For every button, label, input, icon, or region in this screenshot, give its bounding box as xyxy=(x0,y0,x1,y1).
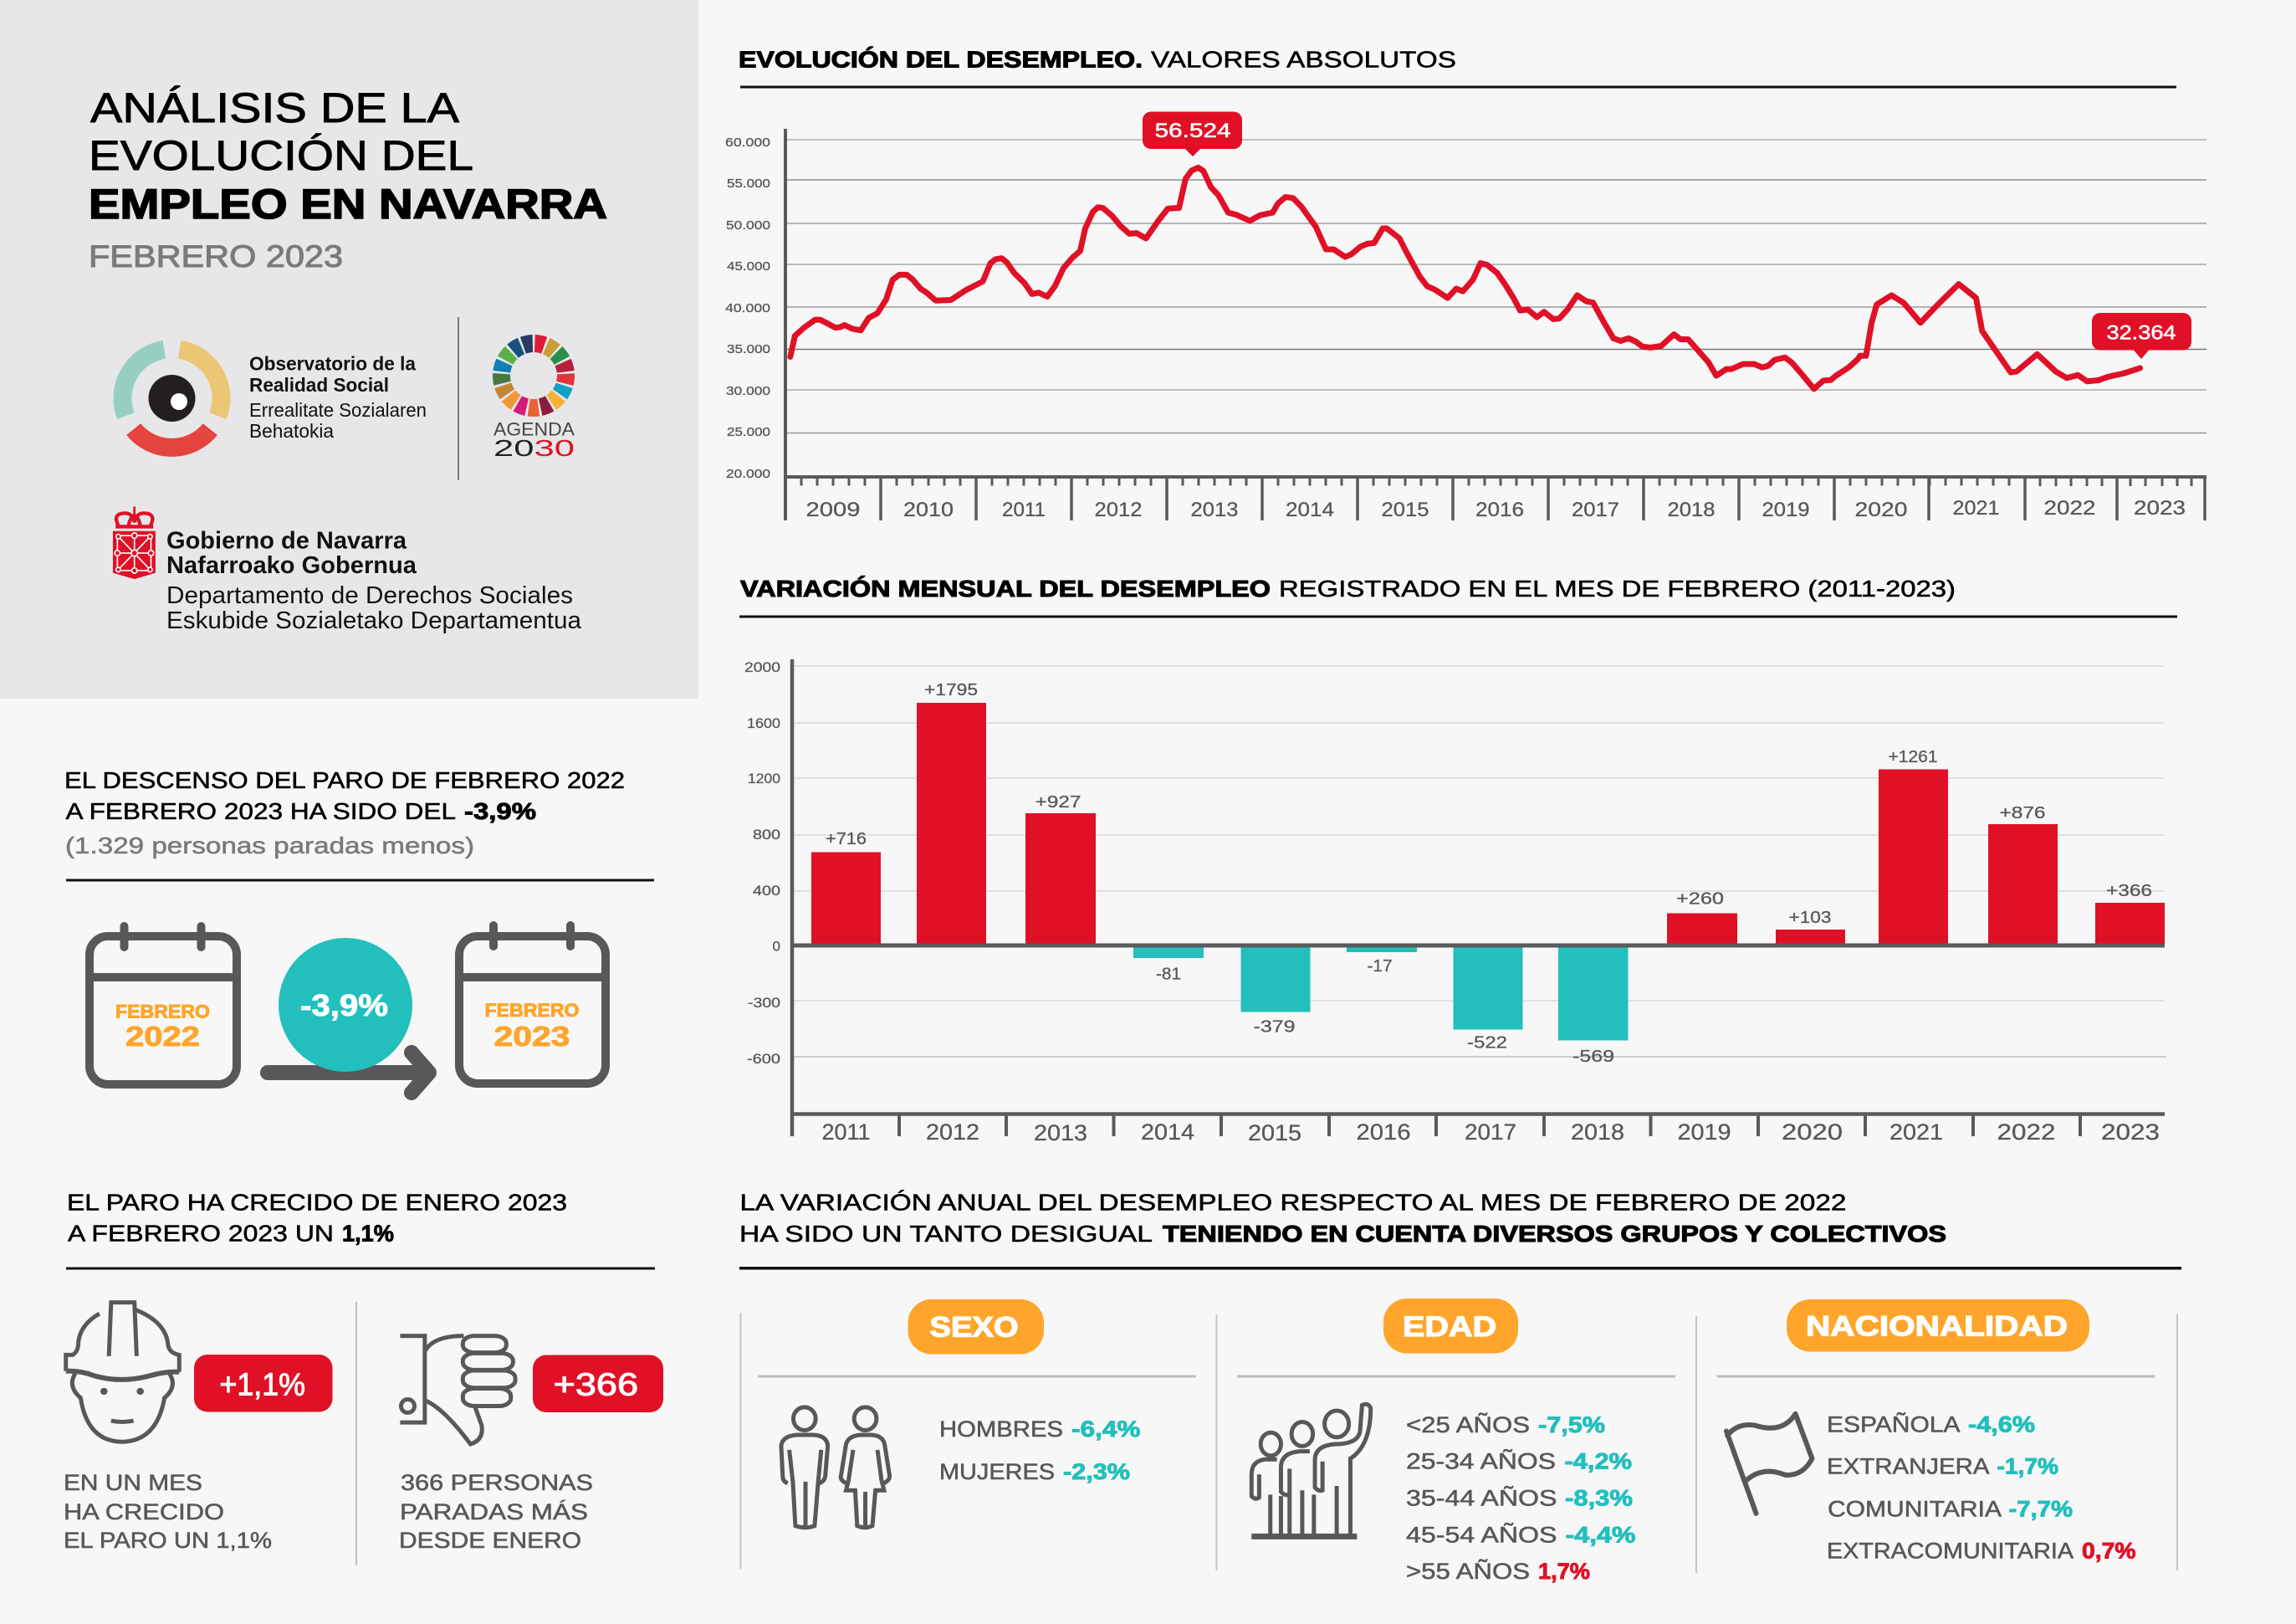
callout: latest 32.364 xyxy=(2092,313,2191,359)
values: sexo: -6,4% xyxy=(1071,1417,1141,1442)
x axis year labels: 2014 xyxy=(1286,499,1334,521)
y axis labels: 800 xyxy=(753,827,780,843)
badge: +366: +366 xyxy=(554,1367,638,1402)
values: edad: 1,7% xyxy=(1538,1559,1590,1584)
text: Gobierno de Navarra: Departamento de Derechos Sociales xyxy=(166,582,573,609)
y axis labels: 400 xyxy=(753,883,780,899)
text: in a month: HA CRECIDO xyxy=(64,1499,224,1524)
values: edad: -7,5% xyxy=(1538,1412,1605,1437)
x axis year labels: 2021 xyxy=(1889,1119,1943,1145)
icon: calendar February 2022: 2022 xyxy=(125,1021,200,1052)
text: Gobierno de Navarra: Eskubide Sozialetako Departamentua xyxy=(166,607,582,634)
y axis labels: 55.000 xyxy=(727,177,770,191)
x axis year labels: 2015 xyxy=(1248,1120,1301,1145)
values: edad: -8,3% xyxy=(1565,1486,1633,1511)
y axis labels: -600 xyxy=(747,1051,780,1067)
heading: bar chart: VARIACIÓN MENSUAL DEL DESEMPLEO xyxy=(740,576,1271,602)
values: edad: <25 AÑOS xyxy=(1406,1412,1530,1437)
values: sexo: HOMBRES xyxy=(939,1417,1063,1442)
x axis year labels: 2013 xyxy=(1034,1120,1087,1145)
badge: +366 xyxy=(533,1355,663,1412)
heading: annual decrease xyxy=(64,767,625,824)
panel: title and logos xyxy=(0,0,698,699)
bar value labels: +927 xyxy=(1036,793,1081,812)
bar value labels: +716 xyxy=(826,830,867,848)
logo: Observatorio de la Realidad Social: Realidad Social xyxy=(249,374,389,396)
text: 366 persons: 366 PERSONAS xyxy=(401,1470,593,1495)
values: nacionalidad: -1,7% xyxy=(1997,1454,2058,1479)
x axis year labels: 2016 xyxy=(1475,499,1524,521)
icon: calendar February 2023 xyxy=(459,925,606,1084)
y axis labels: 20.000 xyxy=(726,467,770,481)
badge: +1,1% xyxy=(194,1355,333,1412)
panel: monthly growth xyxy=(64,1190,663,1565)
x axis year labels: 2013 xyxy=(1191,499,1238,521)
heading: bar chart: REGISTRADO EN EL MES DE FEBRERO (2011-2023) xyxy=(1279,576,1956,602)
y axis labels: 1200 xyxy=(748,771,780,786)
values: edad: -4,4% xyxy=(1566,1523,1636,1548)
heading: annual variation: LA VARIACIÓN ANUAL DEL DESEMPLEO RESPECTO AL MES DE FEBRERO DE 2022 xyxy=(739,1190,1847,1215)
panel: annual decrease xyxy=(64,767,654,1093)
title: ANÁLISIS DE LA xyxy=(90,85,460,131)
group: edad xyxy=(1251,1299,1636,1584)
logo: Agenda 2030: AGENDA xyxy=(493,418,575,440)
y axis labels: 40.000 xyxy=(725,301,770,315)
y axis labels xyxy=(744,659,780,1067)
logo: Gobierno de Navarra crest xyxy=(113,506,156,579)
x axis year labels: 2012 xyxy=(1094,499,1143,521)
y axis labels: 1600 xyxy=(747,715,780,731)
text: Gobierno de Navarra xyxy=(166,527,582,634)
text: Gobierno de Navarra: Nafarroako Gobernua xyxy=(166,552,417,579)
values: sexo: MUJERES xyxy=(939,1459,1055,1484)
y axis labels: 45.000 xyxy=(727,259,770,274)
values: nacionalidad: EXTRACOMUNITARIA xyxy=(1827,1538,2074,1563)
values: nacionalidad: EXTRANJERA xyxy=(1827,1454,1990,1479)
panel: line chart, absolute unemployment xyxy=(725,47,2207,521)
icon: worker with helmet xyxy=(66,1303,179,1442)
heading: line chart xyxy=(739,47,1456,72)
x axis year labels: 2014 xyxy=(1141,1119,1194,1145)
x axis year labels: 2015 xyxy=(1382,499,1429,521)
values: nacionalidad: -7,7% xyxy=(2009,1496,2073,1521)
y axis labels: 60.000 xyxy=(725,136,770,150)
icon: arrow xyxy=(268,1053,429,1093)
y axis labels: 25.000 xyxy=(727,425,770,439)
x axis year labels: 2021 xyxy=(1952,497,1999,520)
text: in a month: EL PARO UN 1,1% xyxy=(64,1528,272,1553)
bar value labels: +260 xyxy=(1676,890,1724,909)
values: nacionalidad: COMUNITARIA xyxy=(1828,1496,2002,1521)
values: nacionalidad xyxy=(1827,1412,2136,1563)
bar value labels: +103 xyxy=(1788,909,1832,927)
x axis year labels: 2022 xyxy=(2044,497,2096,520)
bar value labels xyxy=(826,681,2152,1066)
icon: calendar February 2022: FEBRERO xyxy=(115,1001,210,1022)
text: 366 persons: PARADAS MÁS xyxy=(400,1499,588,1524)
x axis year labels: 2019 xyxy=(1678,1119,1731,1145)
title xyxy=(89,85,607,228)
panel: annual variation by groups xyxy=(739,1190,2181,1584)
values: edad: -4,2% xyxy=(1564,1449,1632,1474)
icon: group of people xyxy=(1251,1404,1371,1536)
badge: -3,9% circle xyxy=(279,938,412,1072)
x axis year labels: 2016 xyxy=(1357,1119,1410,1145)
x axis year labels: 2022 xyxy=(1997,1119,2056,1145)
y axis labels: 0 xyxy=(773,939,780,954)
bar value labels: +1795 xyxy=(924,681,978,699)
x axis year labels: 2020 xyxy=(1782,1119,1843,1145)
logo: Agenda 2030: 20 30 xyxy=(493,435,575,461)
heading: annual variation: HA SIDO UN TANTO DESIGUAL xyxy=(739,1221,1153,1247)
bar value labels: +876 xyxy=(1999,804,2046,822)
heading: line chart: EVOLUCIÓN DEL DESEMPLEO. xyxy=(739,47,1143,72)
x axis year labels: 2020 xyxy=(1855,499,1907,521)
text: 366 persons: DESDE ENERO xyxy=(399,1528,581,1553)
callout: peak 56.524 xyxy=(1143,112,1242,156)
title: EVOLUCIÓN DEL xyxy=(89,132,473,179)
x axis year labels: 2012 xyxy=(926,1119,979,1145)
x axis year labels xyxy=(806,497,2186,521)
x axis year labels: 2009 xyxy=(806,499,860,521)
values: edad: 25-34 AÑOS xyxy=(1406,1449,1556,1474)
heading: annual variation xyxy=(739,1190,1946,1247)
x axis year labels: 2023 xyxy=(2134,497,2186,520)
values: nacionalidad: ESPAÑOLA xyxy=(1827,1412,1961,1437)
icon: thumb down xyxy=(400,1336,515,1444)
icon: calendar February 2023: 2023 xyxy=(493,1021,570,1052)
y axis labels: -300 xyxy=(748,995,780,1011)
bar value labels: -569 xyxy=(1572,1048,1614,1066)
heading: annual decrease: A FEBRERO 2023 HA SIDO DEL xyxy=(65,798,456,824)
heading: bar chart xyxy=(740,576,1956,602)
x axis year labels: 2011 xyxy=(821,1119,870,1145)
x axis year labels: 2019 xyxy=(1762,499,1810,521)
y axis labels xyxy=(725,136,770,481)
y axis labels: 50.000 xyxy=(726,218,770,233)
values: edad xyxy=(1406,1412,1636,1584)
icon: calendar February 2023: FEBRERO xyxy=(485,1000,579,1021)
heading: monthly growth xyxy=(67,1190,567,1247)
x axis year labels: 2010 xyxy=(903,499,954,521)
text: in a month: EN UN MES xyxy=(64,1470,202,1495)
logo: Observatorio de la Realidad Social xyxy=(122,350,427,448)
y axis labels: 30.000 xyxy=(726,384,770,398)
heading: monthly growth: A FEBRERO 2023 UN xyxy=(68,1220,334,1247)
callout: latest 32.364: 32.364 xyxy=(2106,321,2176,345)
heading: annual decrease: EL DESCENSO DEL PARO DE FEBRERO 2022 xyxy=(64,767,625,793)
x axis year labels: 2017 xyxy=(1572,499,1619,521)
x axis year labels xyxy=(821,1119,2160,1145)
bar value labels: -522 xyxy=(1467,1034,1507,1053)
heading: monthly growth: 1,1% xyxy=(342,1220,394,1247)
text: 366 persons xyxy=(399,1470,593,1553)
axes and ticks xyxy=(785,129,2207,520)
bar value labels: -17 xyxy=(1367,957,1392,976)
badge: -3,9% circle: -3,9% xyxy=(300,988,388,1022)
panel: bar chart, monthly variation xyxy=(739,576,2177,1145)
heading: annual decrease: -3,9% xyxy=(464,798,536,824)
data line: absolute unemployment xyxy=(790,167,2140,389)
text: in a month xyxy=(64,1470,272,1553)
subtitle: date: FEBRERO 2023 xyxy=(89,239,343,274)
group: sexo xyxy=(781,1299,1141,1528)
pill: nacionalidad: NACIONALIDAD xyxy=(1806,1310,2068,1342)
bars: negative years xyxy=(1133,945,1628,1041)
heading: line chart: VALORES ABSOLUTOS xyxy=(1151,47,1456,72)
values: edad: 45-54 AÑOS xyxy=(1406,1523,1557,1548)
pill: edad xyxy=(1383,1299,1518,1354)
logo: Observatorio de la Realidad Social: Errealitate Sozialaren xyxy=(249,399,427,421)
x axis year labels: 2017 xyxy=(1465,1119,1516,1145)
axes and ticks xyxy=(790,659,2165,1136)
x axis year labels: 2018 xyxy=(1668,499,1715,521)
icon: flag xyxy=(1726,1414,1812,1514)
bar value labels: +1261 xyxy=(1889,748,1937,766)
x axis year labels: 2011 xyxy=(1002,499,1046,521)
bar value labels: -379 xyxy=(1253,1017,1295,1036)
icon: man and woman xyxy=(781,1407,890,1528)
heading: annual variation: TENIENDO EN CUENTA DIVERSOS GRUPOS Y COLECTIVOS xyxy=(1163,1221,1946,1247)
values: sexo: -2,3% xyxy=(1063,1459,1130,1484)
bars: positive years xyxy=(811,703,2165,945)
logo: Observatorio de la Realidad Social: Behatokia xyxy=(249,420,334,442)
pill: sexo: SEXO xyxy=(930,1312,1019,1344)
heading: monthly growth: EL PARO HA CRECIDO DE ENERO 2023 xyxy=(67,1190,567,1215)
values: nacionalidad: -4,6% xyxy=(1968,1412,2035,1437)
y axis labels: 35.000 xyxy=(727,342,770,356)
pill: sexo xyxy=(908,1299,1044,1354)
bar value labels: -81 xyxy=(1156,966,1181,984)
text: persons fewer: (1.329 personas paradas menos) xyxy=(65,832,474,858)
y axis labels: 2000 xyxy=(744,659,780,675)
group: nacionalidad xyxy=(1726,1299,2136,1563)
logo: Agenda 2030 xyxy=(493,342,575,461)
bar value labels: +366 xyxy=(2106,882,2152,900)
x axis year labels: 2023 xyxy=(2101,1119,2160,1145)
text: Gobierno de Navarra: Gobierno de Navarra xyxy=(166,527,407,554)
values: edad: 35-44 AÑOS xyxy=(1406,1486,1557,1511)
callout: peak 56.524: 56.524 xyxy=(1154,120,1231,142)
icon: calendar February 2022 xyxy=(89,926,237,1084)
x axis year labels: 2018 xyxy=(1571,1119,1624,1145)
title: EMPLEO EN NAVARRA xyxy=(89,181,607,228)
values: edad: >55 AÑOS xyxy=(1406,1559,1530,1584)
badge: +1,1%: +1,1% xyxy=(219,1367,305,1402)
pill: edad: EDAD xyxy=(1403,1311,1496,1343)
values: sexo xyxy=(939,1417,1141,1484)
pill: nacionalidad xyxy=(1787,1299,2089,1352)
values: nacionalidad: 0,7% xyxy=(2082,1538,2136,1563)
logo: Observatorio de la Realidad Social: Observatorio de la xyxy=(249,353,416,375)
